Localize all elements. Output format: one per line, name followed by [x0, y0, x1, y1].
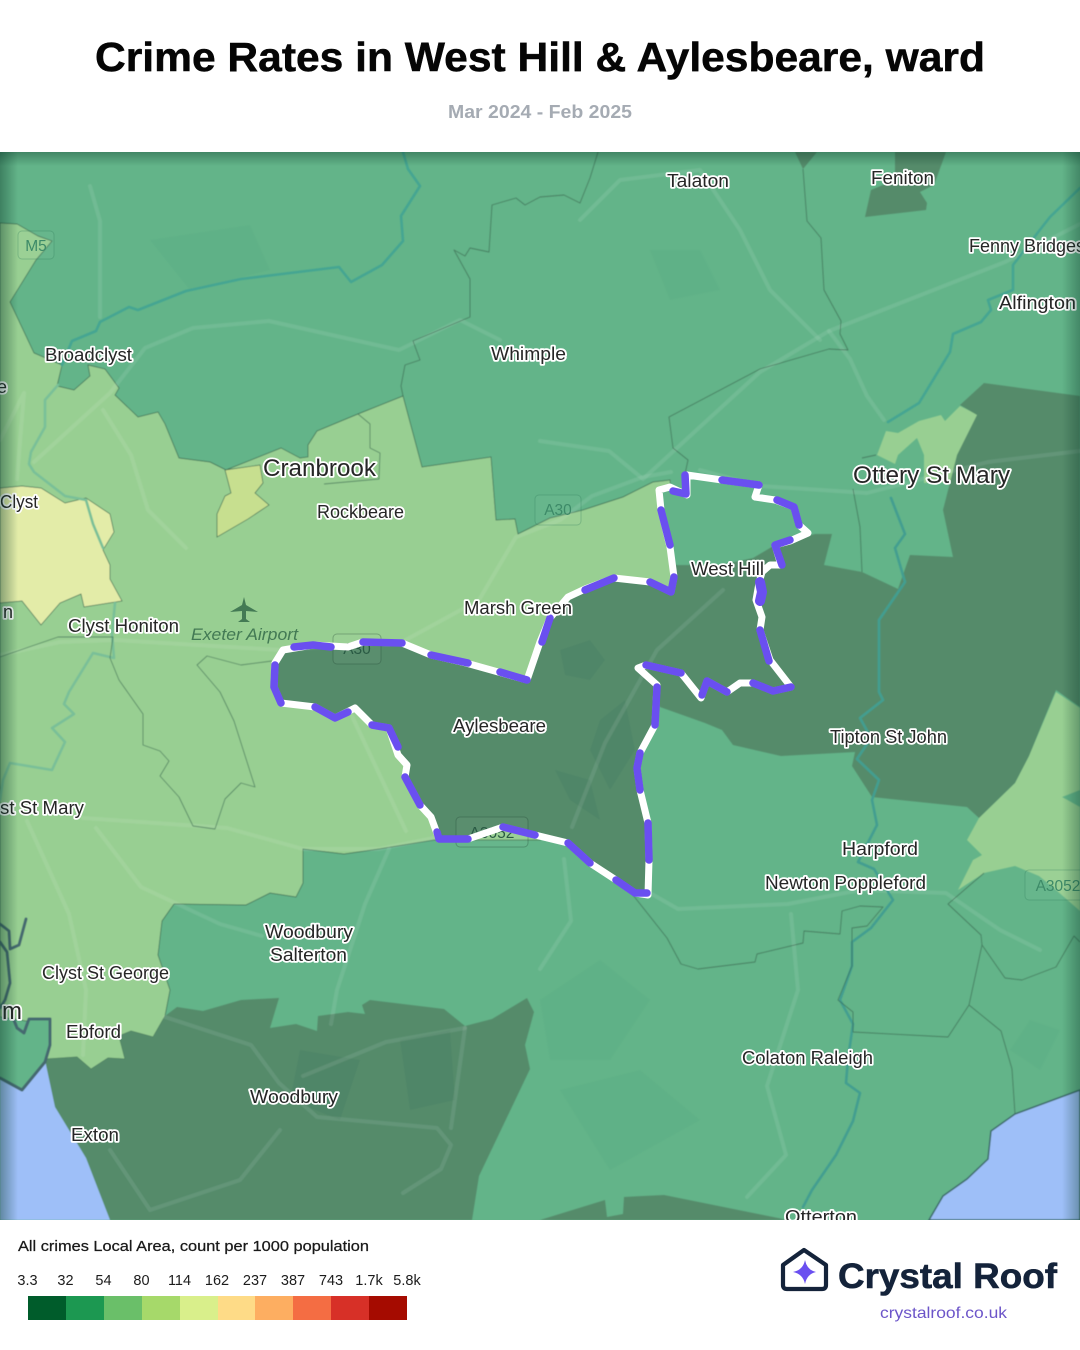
icon: purple star: [793, 1260, 816, 1284]
roads: [0, 170, 1080, 1210]
airport icon: [230, 597, 258, 622]
region: dark green Woodbury: [46, 998, 534, 1220]
map label: Woodbury Salterton: Woodbury: [265, 922, 353, 942]
map label: Woodbury Salterton: Salterton: [270, 945, 347, 965]
region: dark green Otterton: [540, 1195, 788, 1220]
legend scale labels: 32: [57, 1273, 74, 1289]
map label: Whimple: Whimple: [491, 344, 566, 364]
map label: clipped m: m: [2, 998, 22, 1025]
map label: Woodbury Salterton: [265, 922, 353, 965]
ward outline: white base: [274, 475, 808, 895]
ward outline: purple dashes: [274, 475, 799, 893]
legend colour swatches: [28, 1296, 407, 1320]
legend scale labels: 54: [95, 1273, 112, 1289]
map label: Clyst Honiton: Clyst Honiton: [68, 616, 179, 636]
region: yellow-green Cranbrook ward: [217, 465, 269, 537]
legend scale labels: 743: [319, 1273, 343, 1289]
map label: Otterton: Otterton: [785, 1207, 857, 1227]
region: dark green Feniton: [865, 152, 946, 217]
map label: Clyst St George: Clyst St George: [42, 963, 169, 983]
road shield A3052 east: A3052: [1036, 878, 1080, 895]
map label: Tipton St John: Tipton St John: [830, 727, 947, 747]
legend scale labels: 5.8k: [393, 1273, 421, 1289]
legend scale labels: 387: [281, 1273, 305, 1289]
map label: Feniton: Feniton: [871, 168, 934, 188]
website link text: crystalroof.co.uk: [880, 1305, 1008, 1322]
map label: Rockbeare: Rockbeare: [317, 502, 404, 522]
legend scale labels: 80: [133, 1273, 150, 1289]
map label: Newton Poppleford: Newton Poppleford: [765, 873, 926, 893]
road shield A30 east: [535, 495, 581, 525]
road shield A30 west: [333, 634, 381, 664]
region: dark green top sliver: [795, 152, 817, 169]
road shields: [18, 231, 1080, 900]
legend: [17, 1239, 421, 1320]
map base layers: [0, 152, 1080, 1220]
legend scale labels: 162: [205, 1273, 229, 1289]
map label: Ebford: Ebford: [66, 1022, 121, 1042]
road shield A3052 east: [1025, 870, 1080, 900]
road shield M5: M5: [25, 238, 47, 255]
map label: Ottery St Mary: Ottery St Mary: [853, 462, 1010, 489]
region: dark green north-east ward: [640, 383, 1080, 818]
map edge shading: [0, 152, 1080, 1220]
map label: Talaton: Talaton: [667, 171, 729, 191]
map label: Aylesbeare: Aylesbeare: [453, 716, 546, 736]
map label: Exton: Exton: [71, 1125, 119, 1145]
road shield A3052 ward: [456, 817, 528, 847]
legend scale labels: 237: [243, 1273, 267, 1289]
logo: Crystal Roof: [783, 1250, 1057, 1322]
region: mid green patch east: [1062, 790, 1080, 807]
region: light green wards west: [0, 223, 680, 1069]
map label: clipped Clyst St Mary: st St Mary: [0, 798, 84, 818]
icon: house outline: [783, 1250, 826, 1289]
map label: Harpford: Harpford: [842, 839, 918, 859]
map label: Woodbury: Woodbury: [250, 1087, 338, 1107]
title: Crime Rates in West Hill & Aylesbeare, ward: [95, 34, 985, 80]
legend scale labels: [17, 1273, 421, 1289]
map label: clipped n: n: [3, 602, 13, 622]
map label: Marsh Green: Marsh Green: [464, 598, 572, 618]
legend title: All crimes Local Area, count per 1000 population: [18, 1239, 369, 1255]
region: pale yellow ward: [0, 486, 122, 625]
river Exe estuary: [0, 919, 50, 1090]
water: sea south-east: [929, 1090, 1080, 1220]
map label: West Hill: West Hill: [691, 559, 764, 579]
legend scale labels: 114: [168, 1273, 191, 1289]
legend scale labels: 1.7k: [355, 1273, 383, 1289]
road shield A30 west: A30: [343, 641, 371, 658]
map label: Exeter Airport: Exeter Airport: [191, 625, 299, 644]
legend scale labels: 3.3: [17, 1273, 38, 1289]
map label: Alfington: Alfington: [999, 293, 1076, 313]
region: light green Ottery patch: [877, 406, 978, 483]
road shield M5: [18, 231, 54, 259]
map label: clipped Clyst: Clyst: [0, 492, 38, 512]
map label: Broadclyst: Broadclyst: [45, 345, 132, 365]
ward boundary lines: [0, 152, 1080, 1114]
woodland patches: [150, 225, 1060, 1170]
water: sea south-west: [0, 1060, 110, 1220]
region: mid green estuary side: [29, 1020, 49, 1055]
subtitle: date range: Mar 2024 - Feb 2025: [448, 102, 632, 122]
road shield A3052 ward: A3052: [470, 825, 514, 842]
region: highlighted ward fill: [278, 547, 772, 890]
region: light green ward east: [958, 692, 1080, 911]
map label: Cranbrook: Cranbrook: [263, 455, 377, 482]
rivers: [0, 152, 1080, 1207]
panel: choropleth map: [0, 152, 1080, 1227]
region: West Hill north part of ward: [662, 480, 802, 566]
map label: Colaton Raleigh: Colaton Raleigh: [742, 1048, 873, 1068]
logo wordmark: Crystal Roof: [838, 1257, 1057, 1296]
road shield A30 east: A30: [544, 502, 572, 519]
